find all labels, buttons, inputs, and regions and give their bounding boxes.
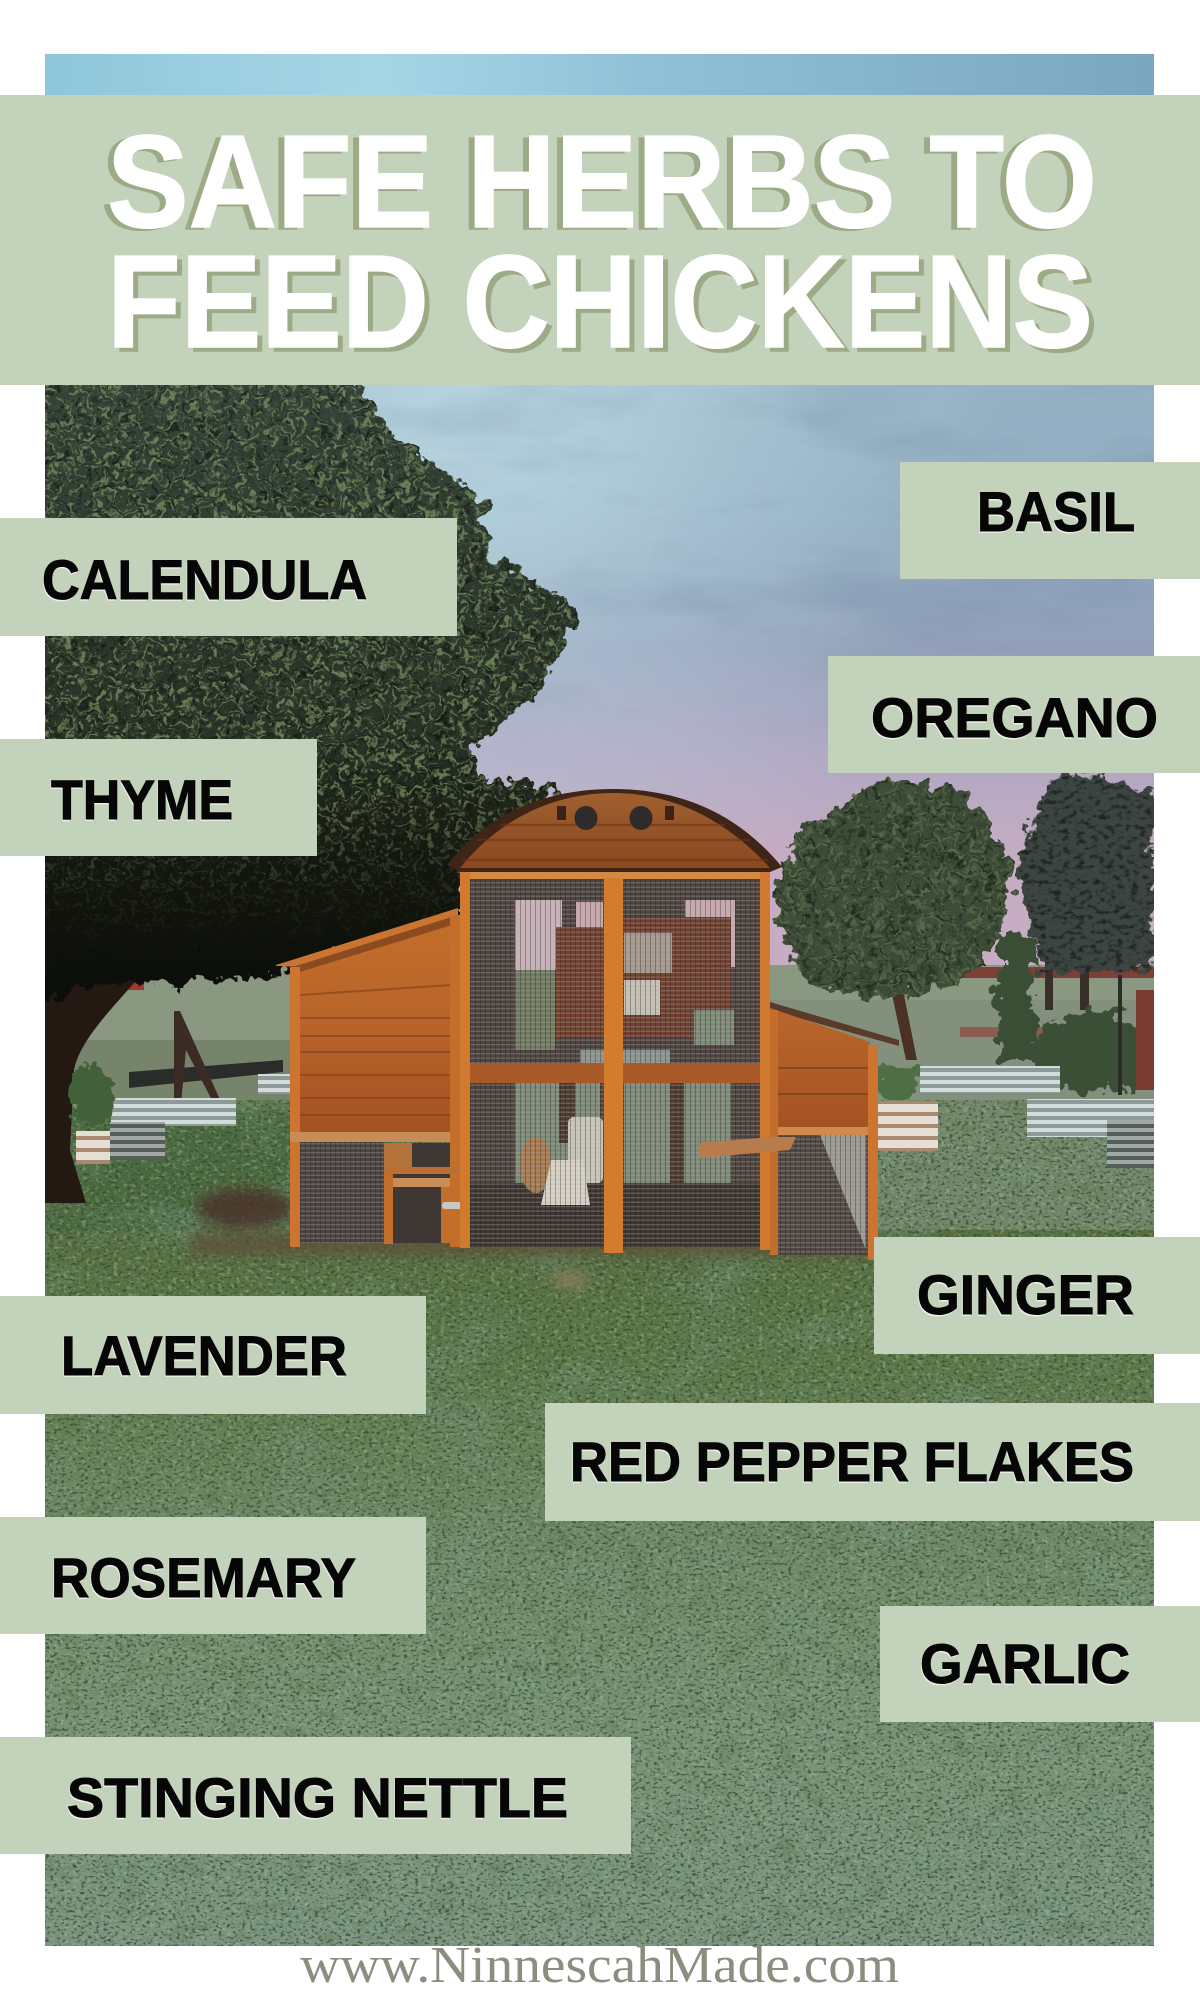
label: ginger <box>874 1237 1200 1354</box>
leafy tree, right of coop <box>770 775 1020 1060</box>
feeder <box>541 1160 590 1205</box>
label: garlic: GARLIC <box>919 1634 1129 1697</box>
wooden chicken coop <box>276 789 899 1260</box>
label: rosemary: ROSEMARY <box>50 1548 355 1611</box>
title line 1: SAFE HERBS TO <box>107 108 1097 255</box>
evening sky with clouds <box>332 385 1154 965</box>
sky strip above the title banner <box>45 54 1154 95</box>
label: oregano: OREGANO <box>871 686 1158 749</box>
website footer: www.NinnescahMade.com <box>300 1937 899 1994</box>
label: stinging nettle: STINGING NETTLE <box>67 1766 568 1829</box>
label: thyme: THYME <box>51 768 233 831</box>
raised metal garden beds, left <box>68 1011 290 1164</box>
title line 2: FEED CHICKENS <box>112 232 1098 379</box>
waterer <box>568 1117 603 1183</box>
label: stinging nettle <box>0 1737 631 1854</box>
label: lavender: LAVENDER <box>61 1324 347 1387</box>
title line 2: FEED CHICKENS <box>107 228 1093 375</box>
label: basil: BASIL <box>977 480 1135 543</box>
pine tree, right <box>1015 773 1154 1010</box>
label: lavender: LAVENDER <box>60 1326 346 1389</box>
wooden perch <box>698 1137 796 1158</box>
label: stinging nettle: STINGING NETTLE <box>66 1768 567 1831</box>
label: red pepper flakes: RED PEPPER FLAKES <box>569 1432 1133 1495</box>
coop arched roof gable <box>447 789 782 872</box>
label: calendula <box>0 518 457 636</box>
label: oregano: OREGANO <box>870 688 1157 751</box>
label: ginger: GINGER <box>916 1265 1133 1328</box>
label: lavender <box>0 1296 426 1414</box>
label: calendula: CALENDULA <box>42 548 367 611</box>
label: red pepper flakes <box>545 1403 1200 1521</box>
label: garlic <box>880 1606 1200 1722</box>
label: thyme: THYME <box>50 770 232 833</box>
label: rosemary <box>0 1517 426 1634</box>
label: rosemary: ROSEMARY <box>51 1546 356 1609</box>
title banner <box>0 95 1200 385</box>
coop top beam and posts <box>460 872 770 879</box>
label: ginger: GINGER <box>917 1263 1134 1326</box>
coop mid beam <box>470 1063 760 1083</box>
left tree trunk <box>45 980 136 1203</box>
lawn and far field behind the coop <box>45 965 1154 1110</box>
label: thyme <box>0 739 317 856</box>
coop left wing <box>276 908 460 1247</box>
label: calendula: CALENDULA <box>41 550 366 613</box>
label: oregano <box>828 656 1200 773</box>
label: garlic: GARLIC <box>920 1632 1130 1695</box>
grass field <box>45 1100 1154 1946</box>
left tree canopy <box>30 375 600 1015</box>
label: basil <box>900 462 1200 579</box>
title line 1: SAFE HERBS TO <box>101 110 1091 257</box>
label: basil: BASIL <box>976 482 1134 545</box>
ground under the coop <box>45 1100 1154 1230</box>
coop right wing <box>770 1002 899 1260</box>
coop central run with mesh <box>460 872 770 1253</box>
raised metal garden beds, right <box>877 1066 1154 1168</box>
label: red pepper flakes: RED PEPPER FLAKES <box>570 1430 1134 1493</box>
soil and mulch around the coop <box>190 1188 880 1289</box>
chicken <box>520 1137 552 1193</box>
garden bush and trellis, right <box>876 935 1161 1102</box>
coop small door <box>384 1143 462 1244</box>
